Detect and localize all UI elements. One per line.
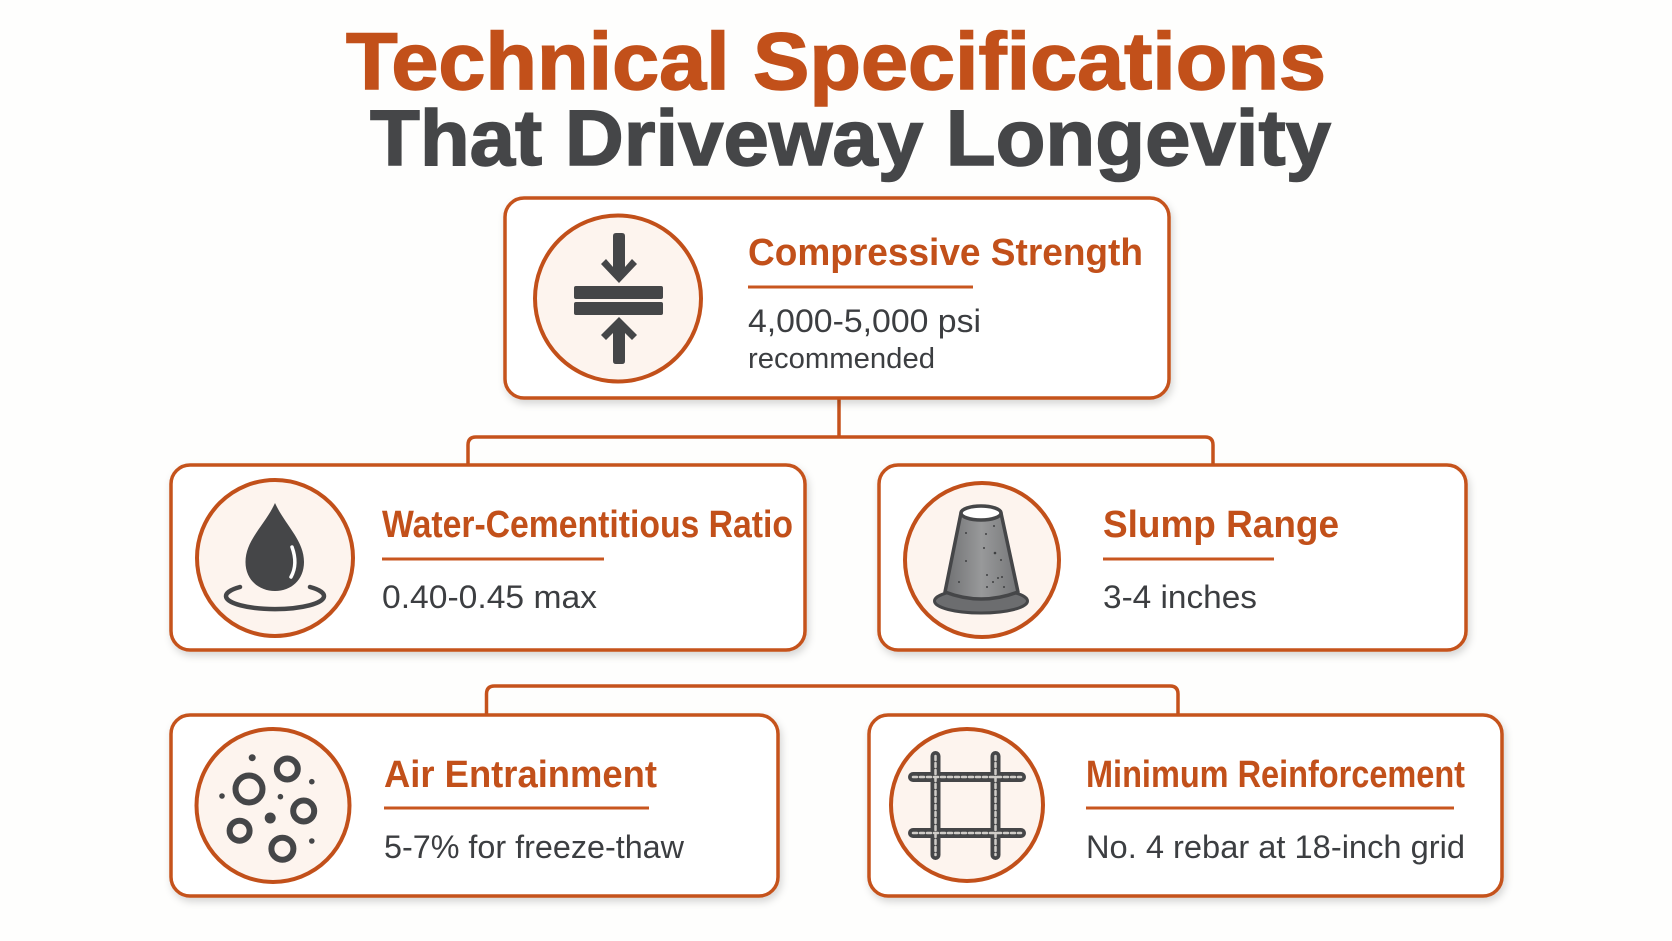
connector: third row [486,686,1178,714]
title line 1: Technical Specifications [346,17,1326,107]
value: 0.40-0.45 max [382,579,597,615]
note: recommended [748,343,935,375]
panel: compressive strength [505,198,1169,398]
icon: rebar grid [891,729,1043,881]
heading: Minimum Reinforcement [1086,754,1465,796]
title line 2: That Driveway Longevity [370,93,1331,182]
value: 5-7% for freeze-thaw [384,829,685,865]
value: 3-4 inches [1103,579,1257,615]
title [346,17,1331,182]
heading: Water-Cementitious Ratio [382,504,793,546]
value: 4,000-5,000 psi [748,303,981,339]
heading: Compressive Strength [748,232,1143,274]
panel: water-cementitious ratio [171,465,805,650]
heading: Air Entrainment [384,754,657,796]
icon: air bubbles [196,729,350,882]
value: No. 4 rebar at 18-inch grid [1086,829,1465,865]
panel: slump range [879,465,1466,650]
heading: Slump Range [1103,504,1339,546]
icon: compression arrows [535,216,701,382]
connector: top card to second row [468,397,1213,465]
panel: minimum reinforcement [869,715,1502,896]
icon: water drop [197,480,353,636]
panel: air entrainment [171,715,778,896]
icon: slump cone [905,483,1059,637]
